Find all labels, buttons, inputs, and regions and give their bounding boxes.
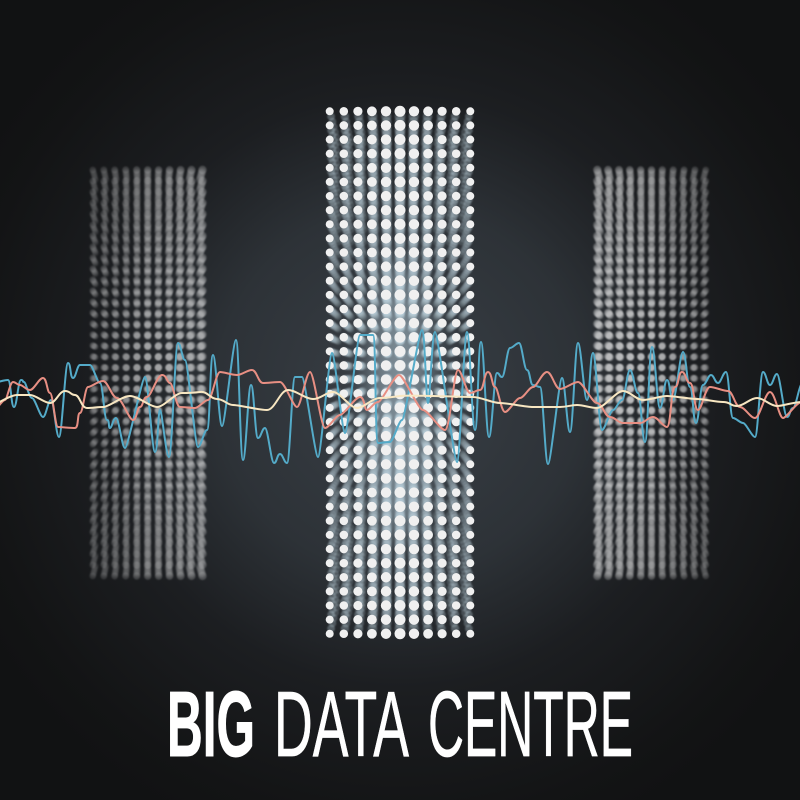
title: CENTRE: CENTRE xyxy=(428,672,633,776)
right dot column xyxy=(597,170,706,577)
centre dot column xyxy=(330,111,470,635)
left dot column xyxy=(93,170,202,577)
title xyxy=(167,672,633,776)
red waveform xyxy=(0,370,800,430)
centre column front dots xyxy=(330,111,470,635)
centre column glow layers xyxy=(331,117,469,629)
centre column light glow xyxy=(370,255,430,545)
title: DATA: DATA xyxy=(274,672,409,776)
cream waveform xyxy=(0,390,800,410)
title: BIG: BIG xyxy=(167,672,255,776)
blue waveform xyxy=(0,330,800,464)
waveforms xyxy=(0,330,800,464)
